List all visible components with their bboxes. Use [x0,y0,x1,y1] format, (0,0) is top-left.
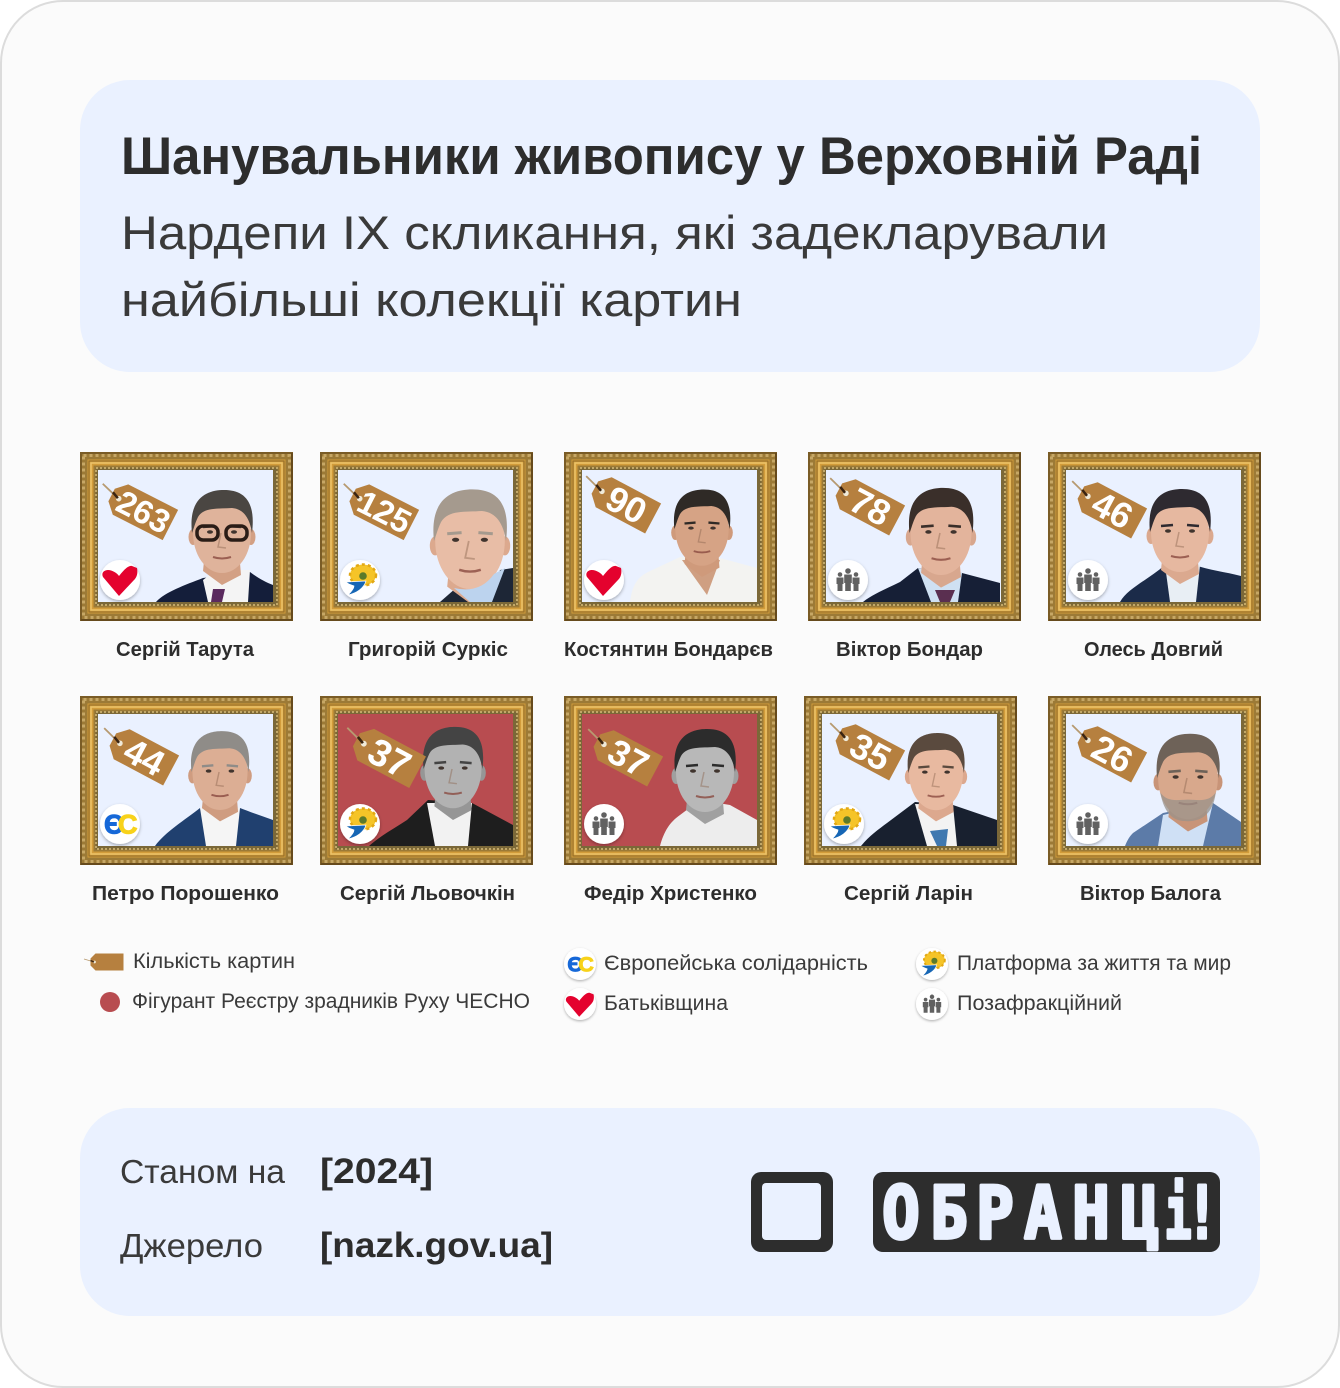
name: Сергій Ларін [844,883,973,905]
badge: Платформа за життя та мир [340,560,380,600]
date value: [2024] [320,1152,433,1191]
price tag: 90 [574,464,663,537]
card: Федір Христенко [564,696,777,905]
card: Сергій Льовочкін [320,696,533,905]
price tag: 26: 26 [1085,726,1140,781]
card: Сергій Ларін [804,696,1017,905]
card: Петро Порошенко [80,696,293,905]
price tag: 125 [332,473,420,542]
logo: wordmark [873,1171,1220,1256]
badge: Європейська солідарність [100,804,140,844]
framed portrait [320,452,533,621]
card: Олесь Довгий [1048,452,1261,661]
card: Віктор Балога [1048,696,1261,905]
name: Олесь Довгий [1084,639,1223,661]
name: Костянтин Бондарєв [564,639,773,661]
legend: European Solidarity [564,948,868,980]
date label: Станом на [120,1153,286,1190]
logo: wordmark: Б [930,1171,968,1255]
badge: Позафракційний [584,804,624,844]
name: Віктор Балога [1080,883,1222,905]
price tag: 44: 44 [117,729,172,784]
price tag: 78 [818,466,907,539]
price tag: 44 [92,716,181,789]
badge: Платформа за життя та мир [824,804,864,844]
framed portrait [320,696,533,865]
subtitle line two: найбільші колекції картин [121,273,742,326]
title: Шанувальники живопису у Верховній Раді [121,127,1202,186]
price tag: 90: 90 [599,477,654,532]
badge: Позафракційний [828,560,868,600]
price tag: 78: 78 [843,479,898,534]
framed portrait [1048,452,1261,621]
framed portrait [80,452,293,621]
price tag: 46: 46 [1085,482,1140,537]
legend: Platform for Life and Peace: Платформа за життя та мир [957,952,1231,975]
framed portrait [564,452,777,621]
panel: footer [80,1108,1260,1316]
logo: wordmark: О [882,1171,920,1255]
legend: number of paintings: Кількість картин [133,950,295,973]
framed portrait [564,696,777,865]
source value: [nazk.gov.ua] [320,1226,553,1265]
card: Сергій Тарута [80,452,293,661]
price tag: 35: 35 [843,724,898,779]
name: Сергій Тарута [116,639,255,661]
legend: Batkivshchyna [564,988,728,1020]
name: Віктор Бондар [836,639,983,661]
price tag: 26 [1060,713,1149,786]
price tag: 37: 37 [361,731,417,787]
name: Сергій Льовочкін [340,883,515,905]
name: Федір Христенко [584,883,757,905]
framed portrait [808,452,1021,621]
legend: Platform for Life and Peace [916,948,1231,980]
price tag: 35 [818,711,907,784]
legend [84,948,1231,1020]
logo: wordmark: Н [1072,1171,1110,1255]
badge: Платформа за життя та мир [340,804,380,844]
logo: square mark opening [762,1183,821,1240]
price tag: 263 [91,473,179,542]
legend: Batkivshchyna: Батьківщина [604,992,728,1015]
price tag: 37: 37 [601,730,656,785]
logo: wordmark: Ц [1121,1171,1159,1255]
logo: wordmark: А [1024,1171,1062,1255]
badge: Батьківщина [100,560,140,600]
legend: non-faction [916,988,1122,1020]
price tag: 263: 263 [111,483,176,541]
source label: Джерело [120,1227,263,1264]
logo: wordmark: і [1164,1172,1192,1256]
price tag: 37 [576,717,665,790]
framed portrait [804,696,1017,865]
price tag: 37 [334,716,427,792]
framed portrait [1048,696,1261,865]
price tag: 46 [1060,469,1149,542]
price tag: 125: 125 [352,483,417,541]
subtitle: Нардепи ІХ скликання, які задекларували [121,206,1108,259]
legend: non-faction: Позафракційний [957,992,1122,1015]
logo: square mark [751,1172,833,1252]
card: Віктор Бондар [808,452,1021,661]
logo: wordmark: ! [1185,1172,1219,1256]
badge: Позафракційний [1068,560,1108,600]
panel: header [80,80,1260,372]
name: Петро Порошенко [92,883,279,905]
card: Григорій Суркіс [320,452,533,661]
badge: Позафракційний [1068,804,1108,844]
legend: registry of traitors: Фігурант Реєстру зрадників Руху ЧЕСНО [132,990,530,1013]
legend: European Solidarity: Європейська солідарність [604,952,868,975]
framed portrait [80,696,293,865]
name: Григорій Суркіс [348,639,508,661]
badge: Батьківщина [584,560,624,600]
card: Костянтин Бондарєв [564,452,777,661]
logo: wordmark: Р [976,1171,1014,1255]
